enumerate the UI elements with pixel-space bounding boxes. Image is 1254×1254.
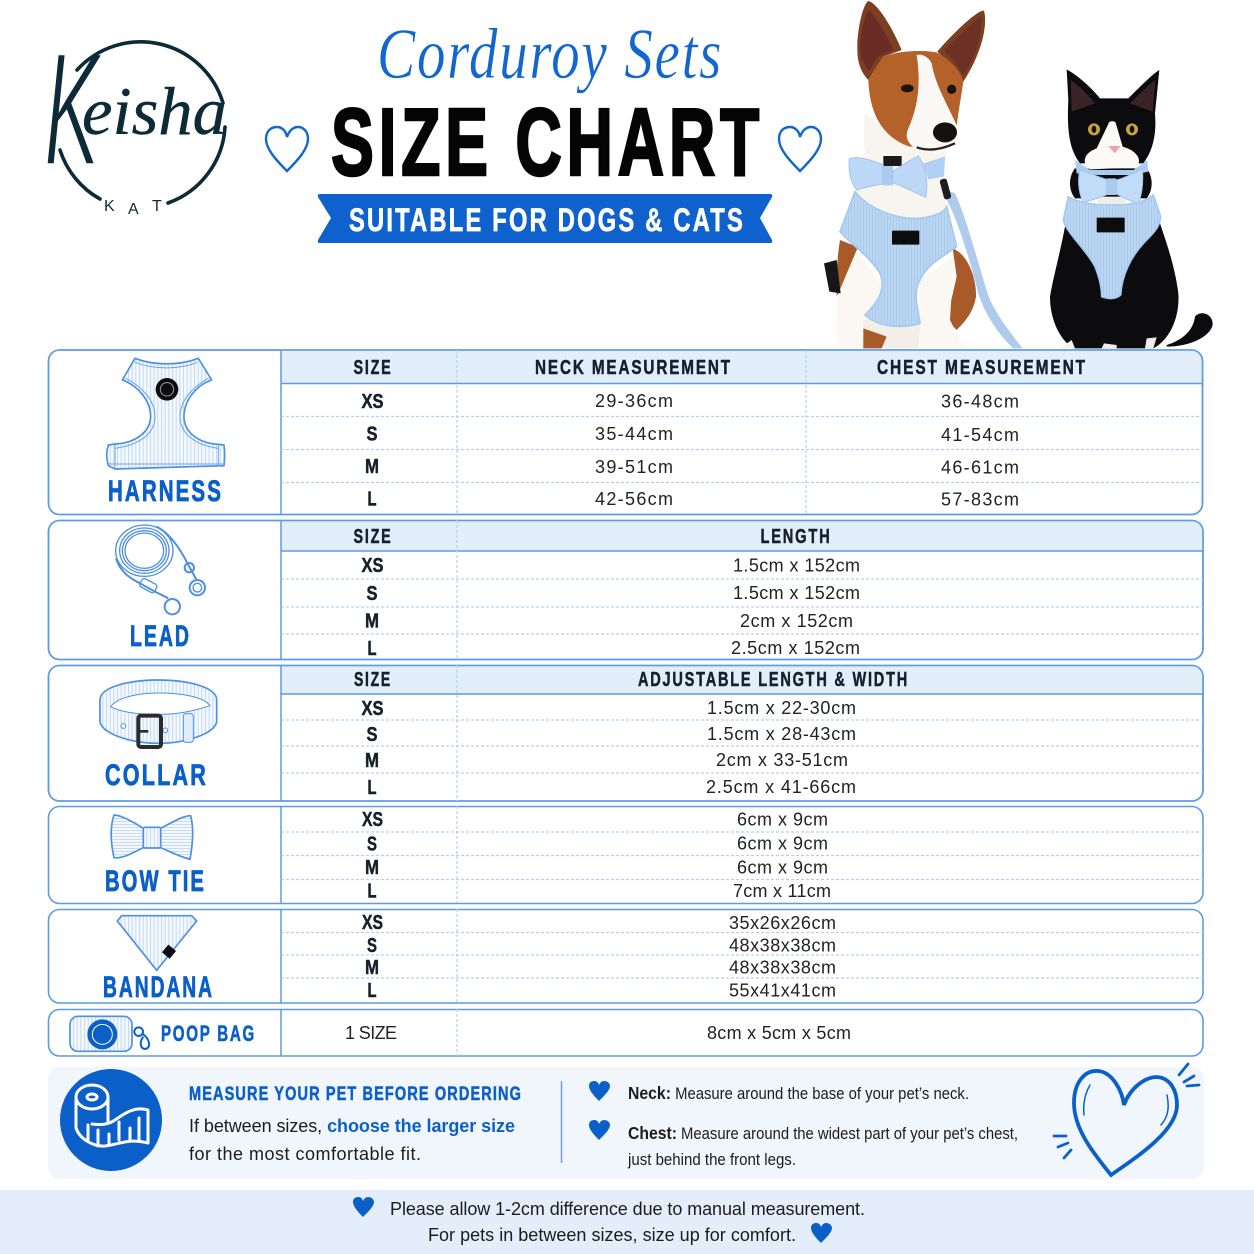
row: harness XS: 36-48cm [941, 392, 1019, 412]
row: harness S: 41-54cm [941, 425, 1019, 445]
row: lead L [368, 638, 860, 660]
row: bandana S [367, 935, 836, 957]
row: bandana XS: 35x26x26cm [729, 913, 836, 933]
row: bow tie XS: 6cm x 9cm [737, 810, 828, 830]
text: chest instruction second line: just behind the front legs. [627, 1151, 796, 1169]
script heading: Corduroy Sets: Corduroy Sets [377, 14, 723, 94]
row: bow tie XS [362, 809, 828, 831]
header row: collar: ADJUSTABLE LENGTH & WIDTH [638, 668, 909, 691]
row: harness L: 57-83cm [941, 490, 1019, 510]
icon: measuring tape [60, 1069, 162, 1171]
header row: lead: SIZE [354, 525, 392, 548]
icon: bandana [117, 916, 197, 970]
row: lead M: 2cm x 152cm [740, 611, 853, 631]
panel: bandana [48, 909, 1203, 1004]
row: collar M: 2cm x 33-51cm [716, 750, 848, 770]
row: bandana XS [362, 912, 836, 934]
icon: heart footer right [811, 1223, 832, 1243]
row: bow tie L [368, 880, 831, 902]
row: bow tie S: 6cm x 9cm [737, 834, 828, 854]
text: chest instruction: Chest: Measure around the widest part of your pet’s chest, [628, 1123, 1018, 1143]
header row: lead [354, 525, 832, 548]
icon: hand-drawn heart [1054, 1064, 1199, 1175]
cat photo illustration [1050, 69, 1213, 348]
text: neck instruction: Neck: Measure around the base of your pet’s neck. [628, 1083, 969, 1103]
row: bandana L: 55x41x41cm [729, 980, 836, 1000]
row: harness M: 46-61cm [941, 458, 1019, 478]
label: harness: HARNESS [108, 475, 223, 508]
row: harness M [365, 456, 1019, 478]
row: lead M [365, 610, 853, 632]
icon: harness [107, 358, 225, 469]
row: lead M: M [365, 610, 379, 632]
row: collar L: 2.5cm x 41-66cm [706, 777, 856, 797]
row: lead XS: XS [362, 555, 384, 577]
row: harness M: M [365, 456, 379, 478]
panel: lead [48, 520, 1203, 660]
row: collar S [366, 724, 856, 746]
row: harness S: S [366, 424, 378, 446]
icon: poop bag [70, 1016, 149, 1051]
ribbon banner: SUITABLE FOR DOGS & CATS [349, 202, 745, 238]
row: lead XS [362, 555, 860, 577]
row: collar M: M [365, 750, 379, 772]
header row: lead: LENGTH [760, 525, 832, 548]
row: collar S: S [366, 724, 378, 746]
row: harness M: 39-51cm [595, 457, 673, 477]
header row: harness: SIZE [354, 356, 392, 379]
logo: Keisha Kat: K [104, 198, 115, 215]
icon: heart bullet neck [589, 1081, 610, 1101]
row: harness S [366, 424, 1019, 446]
row: bow tie XS: XS [362, 809, 383, 831]
row: collar XS: 1.5cm x 22-30cm [707, 698, 856, 718]
row: lead S: S [366, 583, 378, 605]
row: lead S [366, 583, 860, 605]
header row: collar [354, 668, 909, 691]
row: collar S: 1.5cm x 28-43cm [707, 724, 856, 744]
row: lead L: 2.5cm x 152cm [731, 638, 860, 658]
text: footer line two: For pets in between sizes, size up for comfort. [428, 1225, 796, 1245]
header row: harness: NECK MEASUREMENT [535, 356, 732, 379]
row: bow tie S: S [367, 834, 377, 856]
row: bandana S: S [367, 935, 377, 957]
panel: harness [48, 350, 1202, 514]
heading: measure your pet: MEASURE YOUR PET BEFORE ORDERING [189, 1083, 522, 1105]
text: choose the larger size: If between sizes, choose the larger size [189, 1116, 515, 1136]
row: collar L [368, 777, 856, 799]
label: bandana: BANDANA [103, 971, 214, 1004]
icon: collar [100, 680, 217, 747]
row: bandana L [368, 980, 836, 1002]
label: bow tie: BOW TIE [105, 865, 206, 898]
logo: Keisha Kat: A [128, 201, 139, 218]
row: harness L: 42-56cm [595, 489, 673, 509]
row: lead S: 1.5cm x 152cm [733, 583, 860, 603]
icon: bow tie [111, 815, 193, 859]
row: lead L: L [368, 638, 376, 660]
icon: heart bullet chest [589, 1120, 610, 1140]
label: lead: LEAD [130, 620, 191, 653]
row: one size: 1 SIZE [345, 1023, 397, 1043]
icon: heart footer left [353, 1197, 374, 1217]
ribbon banner [318, 194, 772, 243]
footer band [0, 1190, 1254, 1254]
header row: collar: SIZE [354, 668, 392, 691]
row: bandana M: M [365, 957, 379, 979]
panel: poop bag [48, 1009, 1203, 1056]
row: collar L: L [368, 777, 376, 799]
logo: Keisha Kat: eisha [82, 73, 227, 149]
row: bandana M: 48x38x38cm [729, 958, 836, 978]
row: bow tie L: 7cm x 11cm [733, 881, 831, 901]
text: footer line one: Please allow 1-2cm difference due to manual measurement. [390, 1199, 865, 1219]
row: harness S: 35-44cm [595, 424, 673, 444]
row: bandana S: 48x38x38cm [729, 936, 836, 956]
icon: outline heart left [266, 127, 308, 171]
row: collar XS: XS [362, 698, 384, 720]
icon: outline heart right [779, 127, 821, 171]
row: bow tie M [365, 857, 828, 879]
title: SIZE CHART: SIZE CHART [331, 89, 764, 196]
row: bow tie S [367, 834, 828, 856]
logo: Keisha Kat: T [152, 198, 162, 215]
row: harness XS [362, 391, 1019, 413]
row: collar XS [362, 698, 856, 720]
row: harness L: L [368, 488, 376, 510]
row: harness XS: 29-36cm [595, 391, 673, 411]
dog photo illustration [824, 1, 1023, 348]
row: bandana M [365, 957, 836, 979]
row: harness L [368, 488, 1019, 510]
text: most comfortable fit: for the most comfortable fit. [189, 1144, 421, 1164]
row: bandana XS: XS [362, 912, 383, 934]
row: bow tie M: M [365, 857, 379, 879]
icon: lead [116, 525, 205, 614]
row: harness XS: XS [362, 391, 384, 413]
logo: Keisha Kat: K [44, 19, 103, 200]
row: bow tie L: L [368, 880, 376, 902]
row: one size: 8cm x 5cm x 5cm [707, 1023, 851, 1043]
logo: Keisha Kat [44, 19, 227, 218]
panel: measuring guidance [48, 1064, 1204, 1179]
row: bandana L: L [368, 980, 376, 1002]
panel: collar [48, 665, 1203, 801]
row: one size [345, 1023, 851, 1043]
panel: bow tie [48, 806, 1203, 904]
label: poop bag: POOP BAG [161, 1021, 256, 1046]
row: bow tie M: 6cm x 9cm [737, 858, 828, 878]
header row: harness: CHEST MEASUREMENT [877, 356, 1087, 379]
label: collar: COLLAR [105, 759, 208, 792]
row: lead XS: 1.5cm x 152cm [733, 556, 860, 576]
header row: harness [354, 356, 1087, 379]
row: collar M [365, 750, 848, 772]
